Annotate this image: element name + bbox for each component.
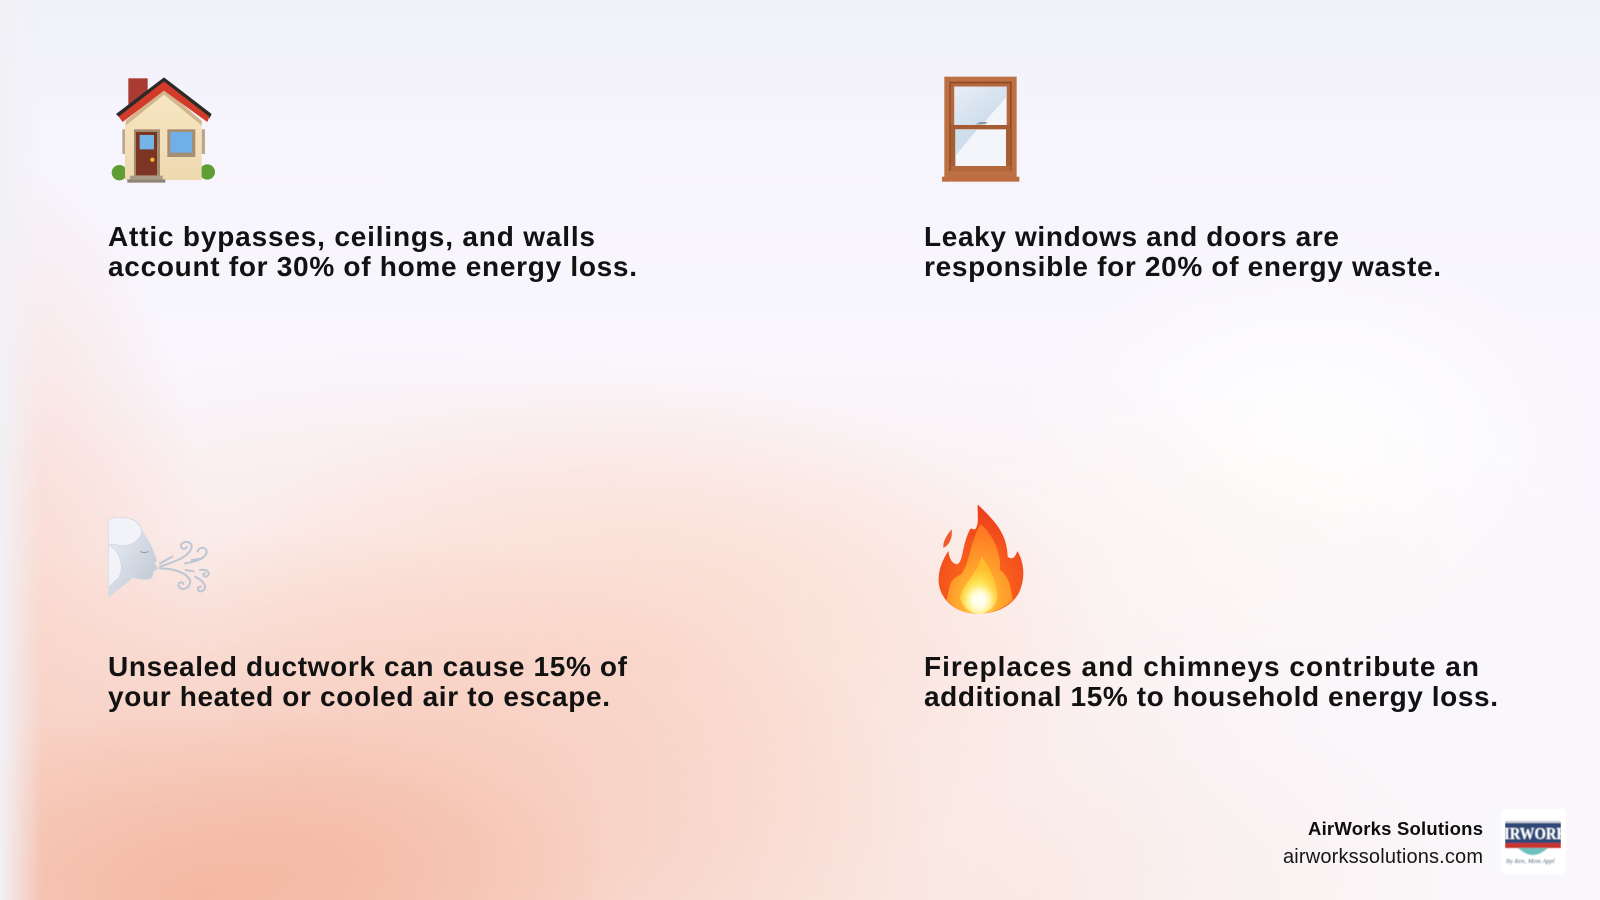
text: attic statistic — [108, 221, 637, 282]
card: attic bypasses — [108, 77, 637, 282]
icon: wind face — [108, 517, 209, 599]
card: ductwork — [108, 517, 628, 712]
icon: flame — [939, 504, 1023, 614]
logo — [1501, 820, 1561, 874]
icon: window — [942, 77, 1019, 182]
text: attic statistic: Attic bypasses, ceilings, and walls — [108, 221, 595, 252]
card: fireplaces — [924, 504, 1498, 712]
brand url: airworkssolutions.com — [1283, 846, 1483, 868]
text: ductwork statistic: Unsealed ductwork can cause 15% of — [108, 651, 628, 682]
text: windows statistic: Leaky windows and doors are — [924, 221, 1339, 252]
card: windows and doors — [924, 77, 1441, 282]
icon: house — [112, 77, 215, 183]
text: ductwork statistic — [108, 651, 628, 712]
brand name: AirWorks Solutions — [1308, 818, 1483, 839]
text: fireplace statistic — [924, 651, 1498, 712]
logo: IRWORKS — [1504, 824, 1576, 843]
text: ductwork statistic: your heated or cooled air to escape. — [108, 681, 610, 712]
text: windows statistic — [924, 221, 1441, 282]
text: attic statistic: account for 30% of home energy loss. — [108, 251, 637, 282]
text: fireplace statistic: additional 15% to household energy loss. — [924, 681, 1498, 712]
footer brand — [1284, 820, 1561, 874]
text: fireplace statistic: Fireplaces and chimneys contribute an — [924, 651, 1479, 682]
text: windows statistic: responsible for 20% of energy waste. — [924, 251, 1441, 282]
logo: By Ren, Mem Appl — [1506, 858, 1555, 865]
